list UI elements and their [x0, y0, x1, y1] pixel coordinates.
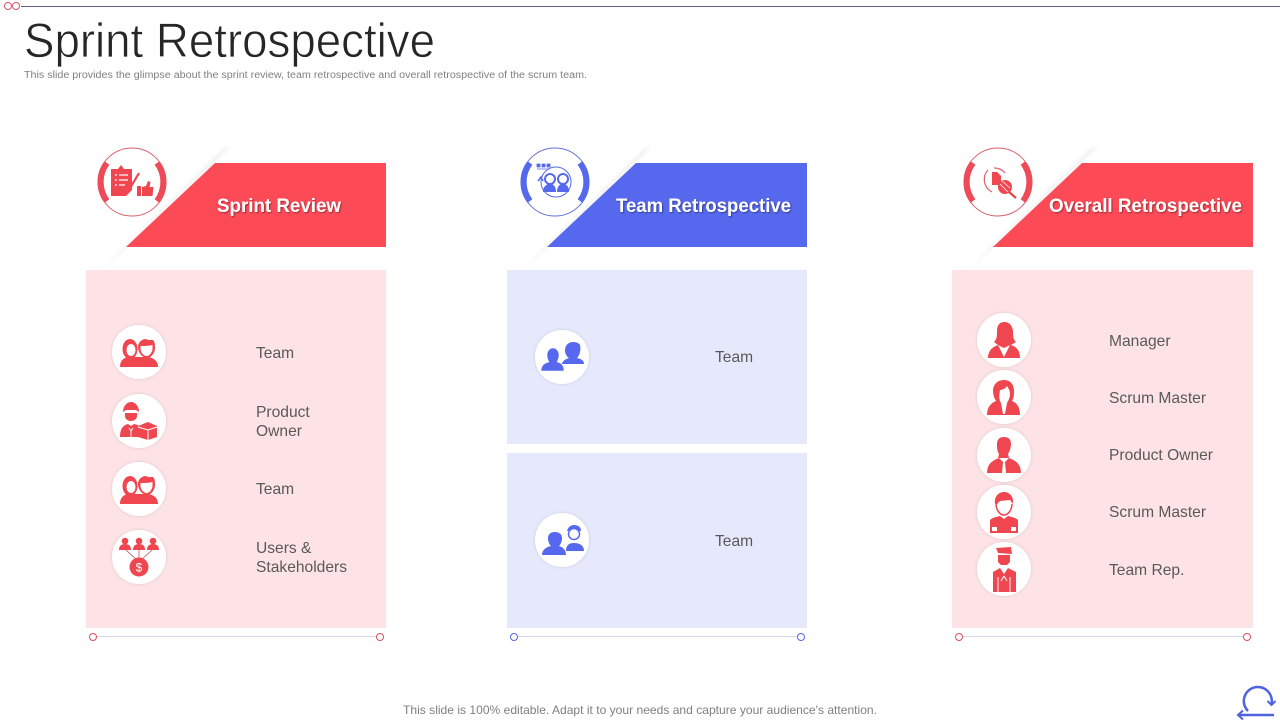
- row: team rep: [977, 542, 1184, 596]
- row: scrum master: Scrum Master: [1109, 390, 1206, 407]
- row: users and stakeholders: [112, 530, 347, 584]
- footer note: This slide is 100% editable. Adapt it to your needs and capture your audience's attention.: [403, 703, 877, 717]
- body panel: team bottom: [507, 453, 807, 628]
- panel: overall retrospective: [952, 145, 1253, 640]
- top rule with rings: [4, 2, 1280, 10]
- body panel: sprint review: [86, 270, 386, 628]
- icon: review magnifier: [964, 148, 1032, 216]
- slider: overall retrospective: [956, 634, 1250, 640]
- icon: clipboard and thumbs up: [98, 148, 166, 216]
- row: team: Team: [256, 345, 294, 362]
- panel: team retrospective: [507, 145, 807, 640]
- subtitle: This slide provides the glimpse about the sprint review, team retrospective and overall retrospective of the scrum team.: [24, 70, 587, 81]
- row: product owner: Product: [256, 404, 310, 421]
- banner shadow: [105, 145, 232, 268]
- row: team bottom: [535, 513, 753, 567]
- banner shadow: [526, 145, 653, 268]
- row: product owner: Owner: [256, 423, 302, 440]
- row: team top: [535, 330, 753, 384]
- row: scrum master: Scrum Master: [1109, 504, 1206, 521]
- row: team: [112, 325, 294, 379]
- row: scrum master: [977, 485, 1206, 539]
- heading: sprint review: Sprint Review: [217, 195, 342, 217]
- row: users and stakeholders: Users &: [256, 540, 312, 557]
- row: manager: Manager: [1109, 333, 1171, 350]
- row: team bottom: Team: [715, 533, 753, 550]
- row: scrum master: [977, 370, 1206, 424]
- heading: overall retrospective: Overall Retrospective: [1049, 195, 1242, 217]
- row: product owner: [112, 394, 310, 448]
- row: team: [112, 462, 294, 516]
- row: team rep: Team Rep.: [1109, 562, 1184, 579]
- row: team top: Team: [715, 349, 753, 366]
- banner: sprint review: [126, 163, 386, 247]
- title: Sprint Retrospective: [24, 15, 435, 68]
- row: users and stakeholders: Stakeholders: [256, 559, 347, 576]
- row: product owner: Product Owner: [1109, 447, 1213, 464]
- body panel: team top: [507, 270, 807, 444]
- panel: sprint review: [86, 145, 386, 640]
- heading: team retrospective: Team Retrospective: [616, 195, 791, 217]
- slider: sprint review: [90, 634, 384, 640]
- icon: loop arrow: [1238, 687, 1276, 720]
- banner shadow: [972, 145, 1099, 268]
- slider: team retrospective: [510, 634, 804, 640]
- row: users and stakeholders: $: [136, 560, 143, 574]
- body panel: overall retrospective: [952, 270, 1253, 628]
- icon: team feedback loop: [521, 148, 589, 216]
- row: manager: [977, 313, 1171, 367]
- banner: overall retrospective: [993, 163, 1253, 247]
- row: product owner: [977, 428, 1213, 482]
- row: team: Team: [256, 481, 294, 498]
- banner: team retrospective: [547, 163, 807, 247]
